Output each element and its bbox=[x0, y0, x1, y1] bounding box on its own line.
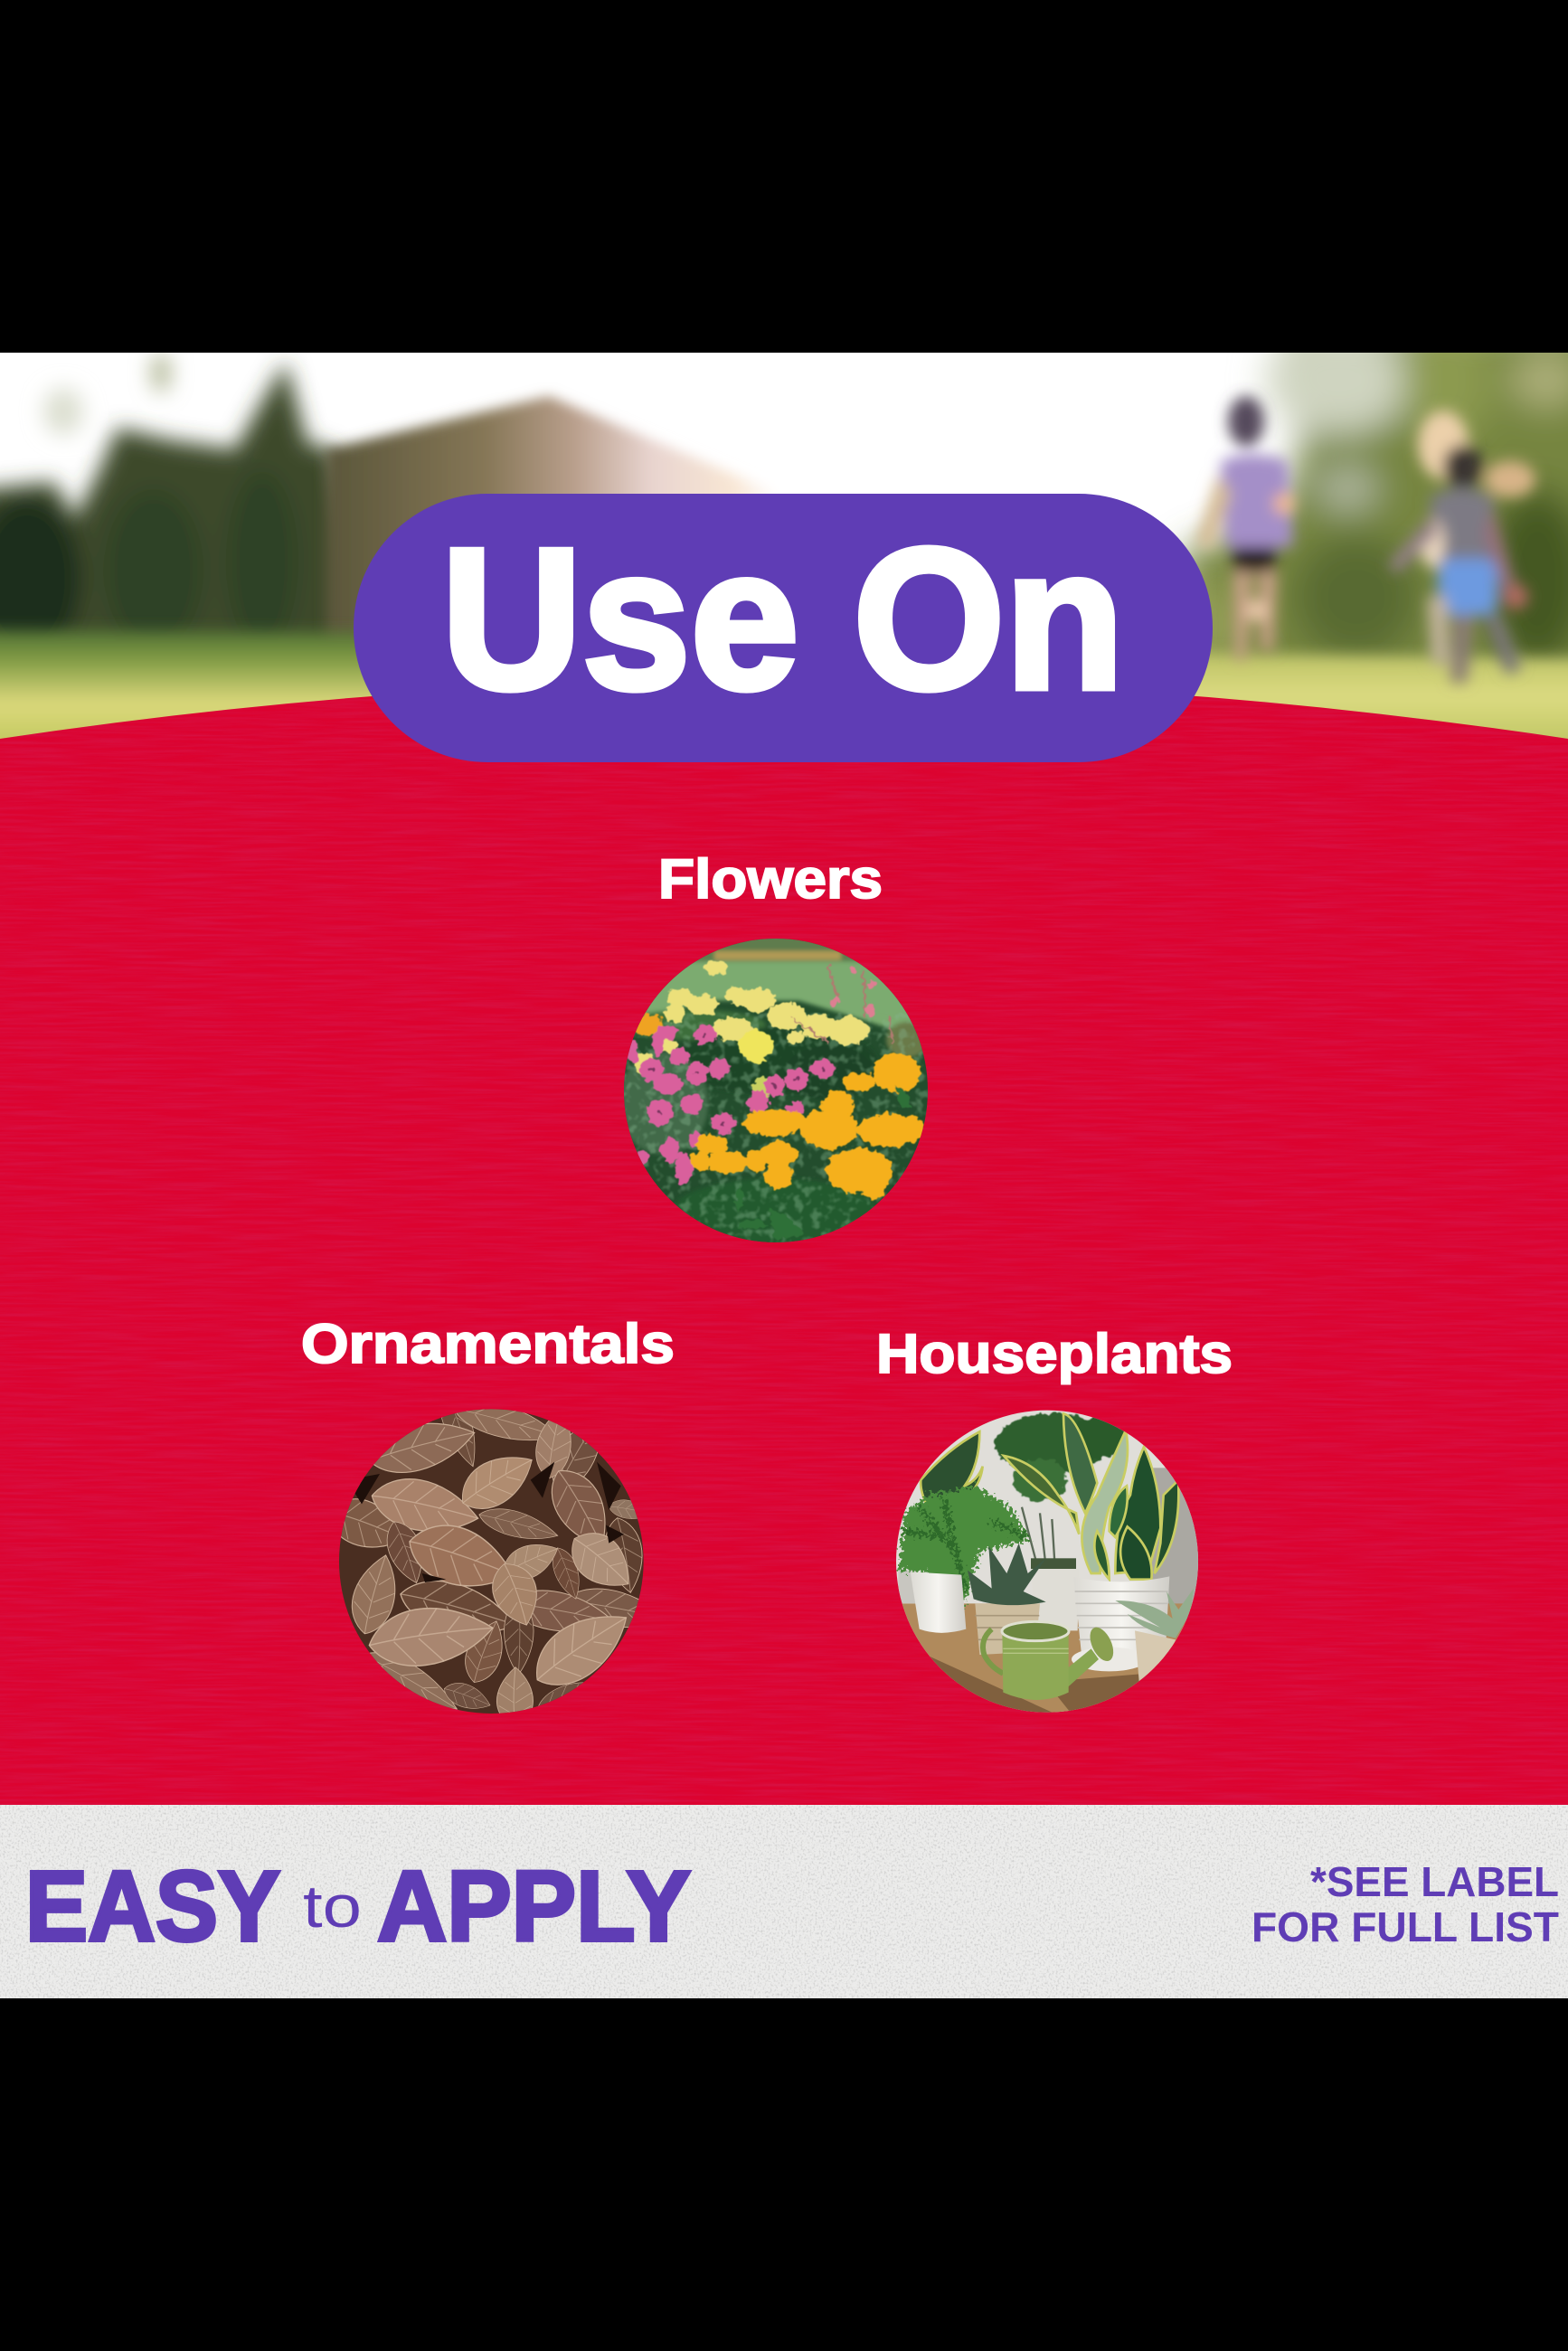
footer logo text: easy to apply: APPLY bbox=[377, 1851, 691, 1962]
child two bbox=[1388, 411, 1535, 683]
house with roof and sun glare bbox=[326, 396, 778, 651]
infographic canvas bbox=[0, 353, 1568, 1998]
trees left bbox=[0, 353, 345, 644]
heading: houseplants: Houseplants bbox=[876, 1323, 1233, 1384]
heading: ornamentals: Ornamentals bbox=[301, 1313, 675, 1374]
footer logo text: easy to apply bbox=[25, 1851, 691, 1962]
white ribbed pot bbox=[1073, 1576, 1169, 1661]
footnote: FOR FULL LIST bbox=[1252, 1903, 1559, 1950]
red textured panel with curved top bbox=[0, 615, 1568, 1805]
small aloe and pot bbox=[1135, 1630, 1176, 1685]
photo: ornamental leaves bbox=[339, 1409, 644, 1714]
grey textured footer band bbox=[0, 1805, 1568, 1998]
fern bbox=[898, 1486, 1031, 1616]
grass right bbox=[1194, 647, 1568, 739]
watering can bbox=[983, 1629, 1003, 1674]
succulent with woven pot bbox=[975, 1603, 1040, 1655]
foliage speckle bbox=[618, 1013, 934, 1248]
footnote: *SEE LABEL bbox=[1310, 1858, 1559, 1905]
fern pot bbox=[911, 1572, 966, 1633]
snake plant big bbox=[1004, 1413, 1178, 1580]
photo: houseplants bbox=[893, 1408, 1203, 1718]
photo: blurred backyard with children bbox=[0, 353, 1568, 739]
title text: Use On bbox=[441, 507, 1124, 732]
grass left bbox=[0, 622, 373, 739]
heading: flowers: Flowers bbox=[658, 848, 883, 910]
footer logo text: easy to apply: to bbox=[303, 1873, 362, 1940]
left snake plant bbox=[919, 1430, 984, 1503]
right trees bbox=[1170, 353, 1568, 671]
background foliage bbox=[995, 1413, 1124, 1501]
child one bbox=[1195, 396, 1295, 660]
footer logo text: easy to apply: EASY bbox=[25, 1851, 280, 1962]
photo: flowers bbox=[618, 934, 934, 1248]
footnote bbox=[1252, 1858, 1559, 1950]
title pill bbox=[354, 494, 1213, 762]
